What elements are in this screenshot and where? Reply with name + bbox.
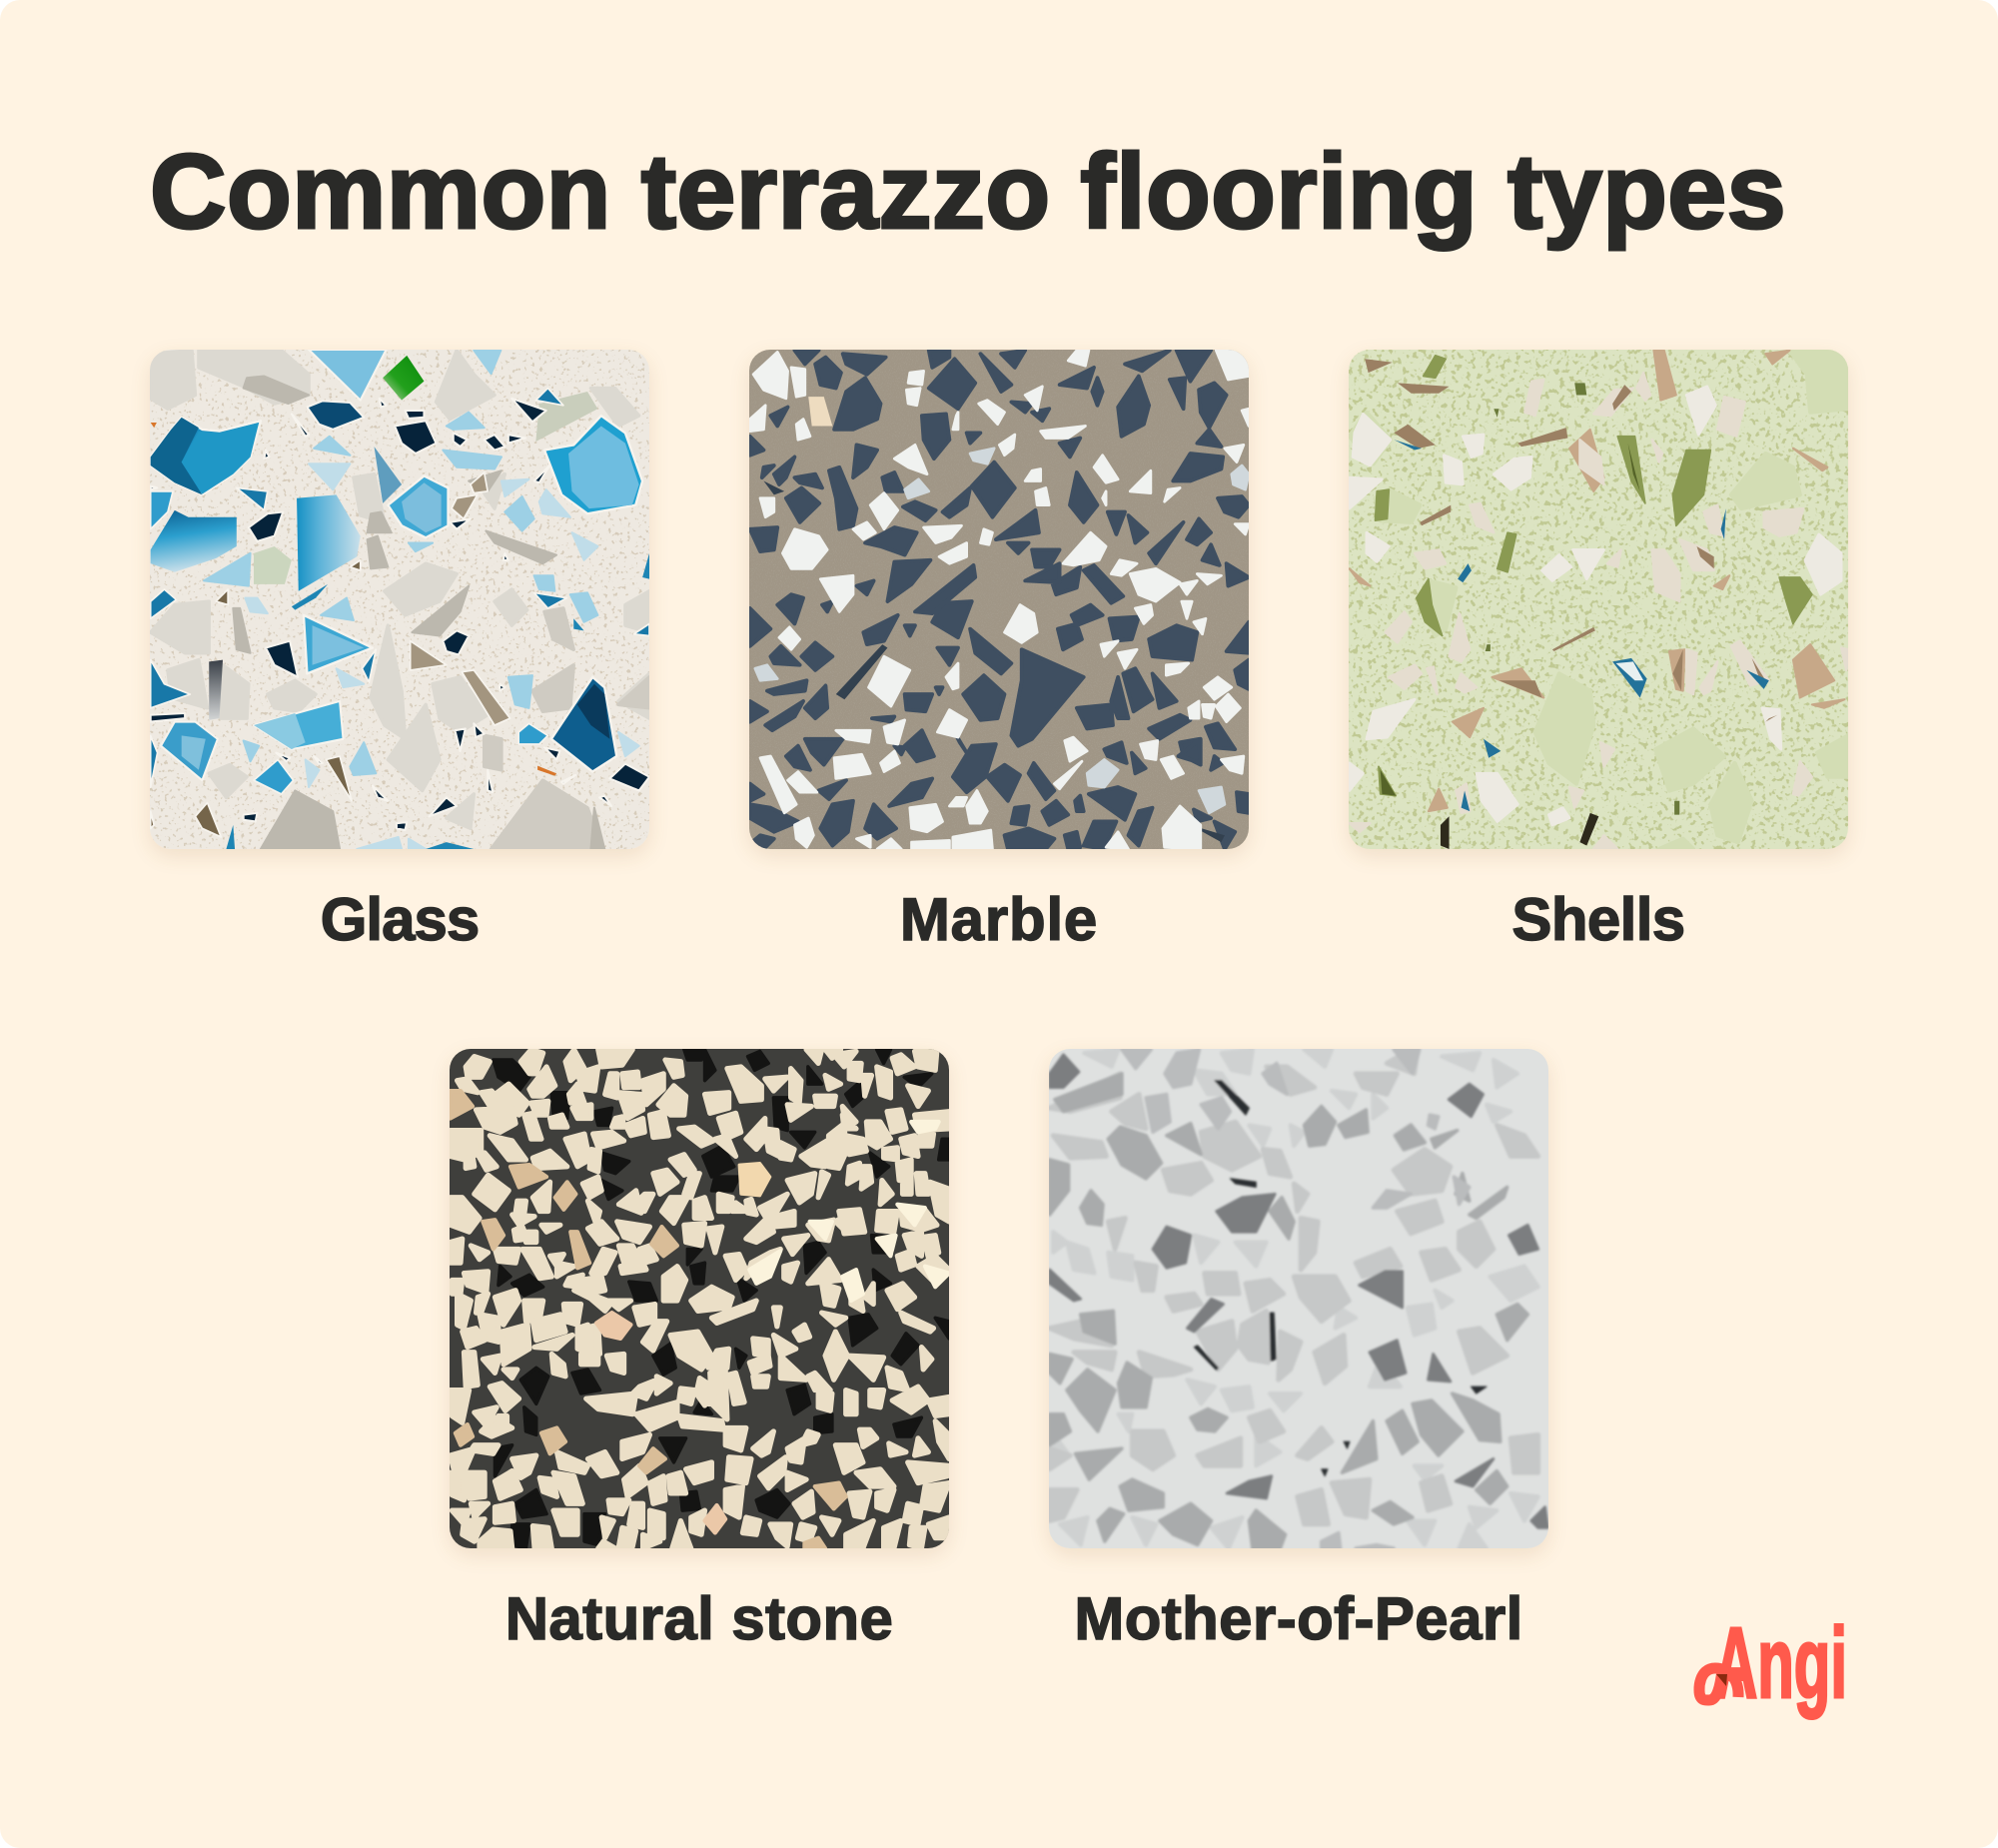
label: Glass: Glass — [321, 886, 479, 953]
logo shadow — [1716, 1674, 1727, 1686]
title: Common terrazzo flooring types — [150, 133, 1786, 251]
panel: shells terrazzo swatch — [1349, 350, 1848, 849]
logo: Angi — [1694, 1607, 1847, 1720]
panel: marble terrazzo swatch — [749, 350, 1249, 849]
label: Shells: Shells — [1511, 886, 1685, 953]
panel: glass terrazzo swatch — [150, 350, 649, 849]
panel: mother-of-pearl terrazzo swatch — [1049, 1049, 1548, 1548]
label: Natural stone: Natural stone — [505, 1585, 893, 1652]
panel: natural stone terrazzo swatch — [450, 1049, 949, 1548]
logo swoosh — [1699, 1668, 1738, 1700]
label: Marble: Marble — [900, 886, 1098, 953]
label: Mother-of-Pearl: Mother-of-Pearl — [1074, 1585, 1523, 1652]
